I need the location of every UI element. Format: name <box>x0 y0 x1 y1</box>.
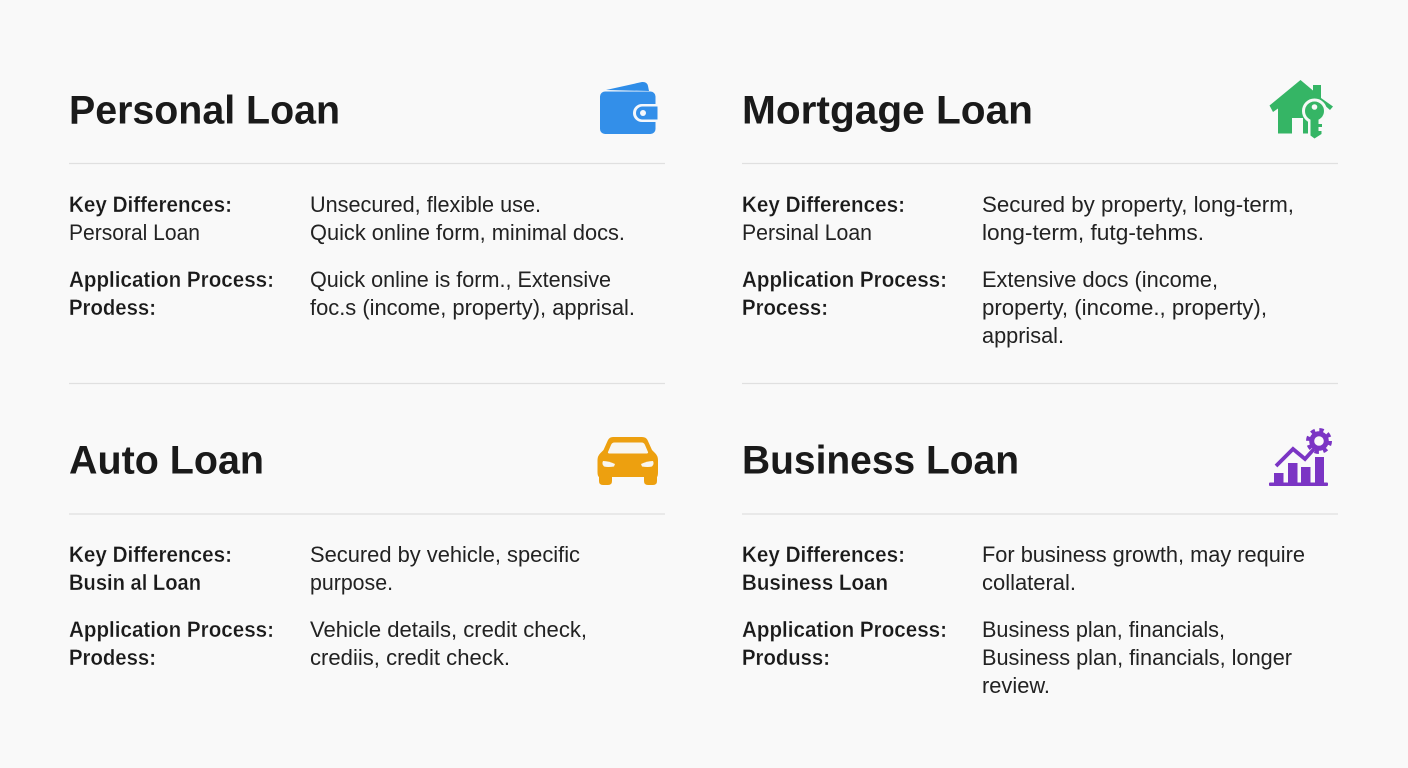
label: key differences <box>742 192 905 245</box>
label: key differences: Key Differences: <box>69 192 232 217</box>
text: key differences detail: Unsecured, flexible use. <box>310 192 541 217</box>
label: application process: Application Process: <box>69 617 274 642</box>
icon: blue wallet <box>600 82 658 134</box>
icon: purple growth chart with gear <box>1269 430 1330 486</box>
label: key differences <box>742 542 905 595</box>
label: key differences: Busin al Loan <box>69 570 201 595</box>
label: application process: Process: <box>742 295 828 320</box>
text: application process detail: apprisal. <box>982 323 1064 348</box>
label: application process: Application Process: <box>742 267 947 292</box>
panel: mortgage loan <box>742 80 1333 348</box>
text: application process detail: property, (income., property), <box>982 295 1267 320</box>
icon: green house with key <box>1270 80 1333 138</box>
text: application process detail <box>310 617 587 670</box>
panel: auto loan <box>69 437 658 670</box>
text: key differences detail: For business growth, may require <box>982 542 1305 567</box>
label: application process: Application Process: <box>69 267 274 292</box>
text: application process detail: Vehicle details, credit check, <box>310 617 587 642</box>
text: application process detail: Business plan, financials, <box>982 617 1225 642</box>
label: key differences: Key Differences: <box>69 542 232 567</box>
text: key differences detail <box>982 542 1305 595</box>
heading: business loan: Business Loan <box>742 438 1019 482</box>
label: key differences: Key Differences: <box>742 192 905 217</box>
text: application process detail: foc.s (income, property), apprisal. <box>310 295 635 320</box>
text: key differences detail <box>982 192 1294 245</box>
label: application process <box>69 617 274 670</box>
panel: business loan <box>742 430 1330 698</box>
label: key differences <box>69 192 232 245</box>
label: application process <box>742 267 947 320</box>
text: application process detail: Quick online is form., Extensive <box>310 267 611 292</box>
label: key differences: Persinal Loan <box>742 220 872 245</box>
label: application process <box>742 617 947 670</box>
text: application process detail <box>310 267 635 320</box>
label: key differences: Business Loan <box>742 570 888 595</box>
text: application process detail: Extensive docs (income, <box>982 267 1218 292</box>
icon: orange car <box>598 437 658 485</box>
text: application process detail: crediis, credit check. <box>310 645 510 670</box>
label: application process: Prodess: <box>69 295 156 320</box>
label: application process <box>69 267 274 320</box>
text: application process detail: Business plan, financials, longer <box>982 645 1292 670</box>
text: application process detail: review. <box>982 673 1050 698</box>
label: key differences: Persoral Loan <box>69 220 200 245</box>
text: application process detail <box>982 267 1267 348</box>
text: key differences detail: long-term, futg-tehms. <box>982 220 1204 245</box>
panel: personal loan <box>69 82 658 320</box>
text: key differences detail: Quick online form, minimal docs. <box>310 220 625 245</box>
text: key differences detail: Secured by vehicle, specific <box>310 542 580 567</box>
label: key differences <box>69 542 232 595</box>
text: key differences detail <box>310 192 625 245</box>
heading: auto loan: Auto Loan <box>69 438 264 482</box>
text: key differences detail: collateral. <box>982 570 1076 595</box>
text: key differences detail: purpose. <box>310 570 393 595</box>
heading: personal loan: Personal Loan <box>69 88 340 132</box>
label: application process: Application Process: <box>742 617 947 642</box>
text: key differences detail <box>310 542 580 595</box>
label: application process: Produss: <box>742 645 830 670</box>
text: application process detail <box>982 617 1292 698</box>
text: key differences detail: Secured by property, long-term, <box>982 192 1294 217</box>
label: application process: Prodess: <box>69 645 156 670</box>
heading: mortgage loan: Mortgage Loan <box>742 88 1033 132</box>
label: key differences: Key Differences: <box>742 542 905 567</box>
